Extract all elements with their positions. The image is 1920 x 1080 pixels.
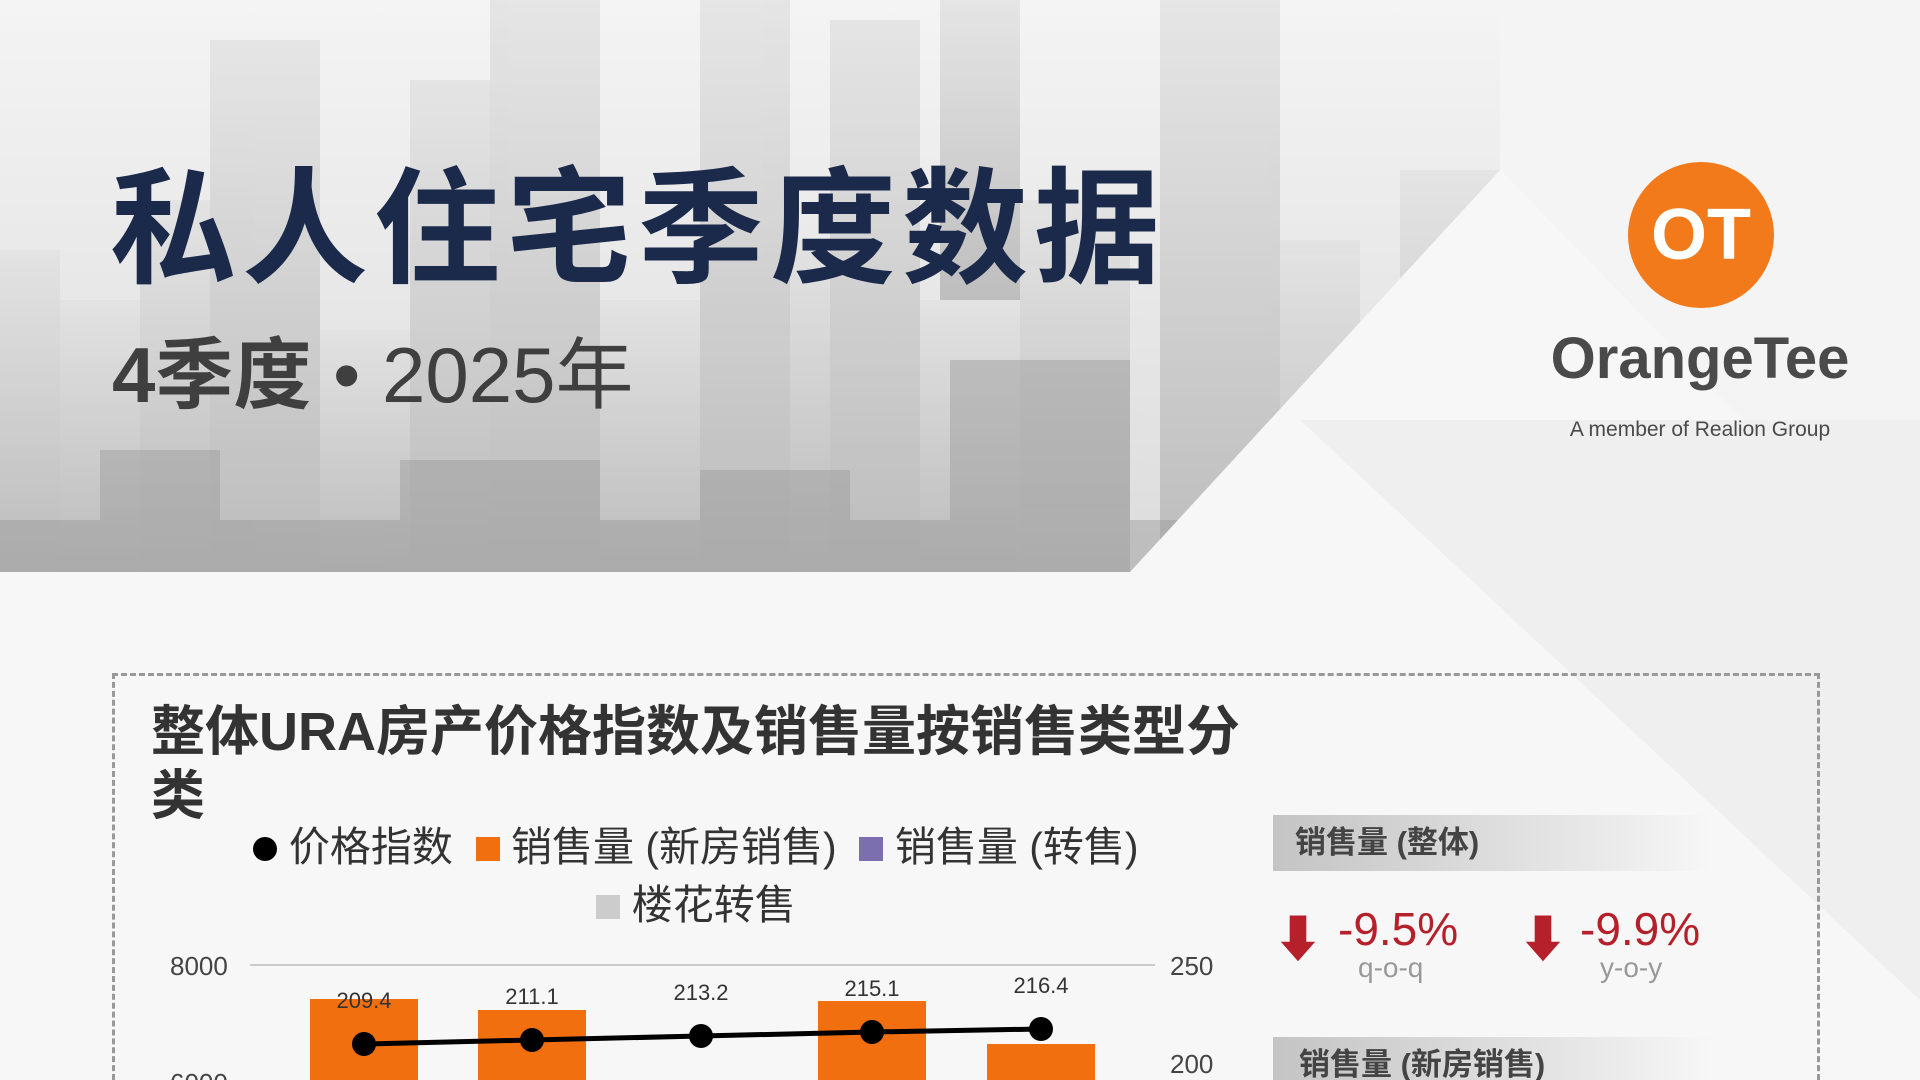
bar chart: 215.1 <box>844 976 900 1001</box>
legend: 价格指数 销售量 (新房销售) 销售量 (转售) <box>289 824 1139 870</box>
header bar: 销售量 (整体) <box>1295 825 1479 860</box>
background: city skyline <box>0 0 1500 572</box>
panel: chart box <box>112 673 1820 1080</box>
legend: 楼花转售 <box>632 882 796 928</box>
legend <box>253 824 1139 928</box>
bar chart: 209.4 <box>336 988 392 1013</box>
bar chart: 211.1 <box>505 984 559 1009</box>
stat q-o-q: -9.5% <box>1338 903 1458 955</box>
chart title: 整体URA房产价格指数及销售量按销售类型分类 <box>151 702 1240 826</box>
stat y-o-y: y-o-y <box>1600 952 1662 983</box>
bar chart: 200 <box>1170 1049 1213 1079</box>
icon: orange circle logo: OT <box>1651 195 1751 275</box>
icon: orange circle logo <box>1628 162 1774 308</box>
stat y-o-y <box>1518 903 1700 983</box>
bar chart: 250 <box>1170 951 1213 981</box>
bar chart: 216.4 <box>1013 973 1069 998</box>
panel: sales overall <box>1273 815 1700 983</box>
stat q-o-q <box>1273 903 1458 983</box>
stat y-o-y: -9.9% <box>1580 903 1700 955</box>
logo <box>1551 162 1849 441</box>
bar chart: 213.2 <box>673 980 729 1005</box>
stat q-o-q: ⬇ <box>1273 912 1323 968</box>
brand name: OrangeTee <box>1551 326 1849 391</box>
stat q-o-q: q-o-q <box>1358 952 1423 983</box>
title: 私人住宅季度数据 <box>110 159 1166 300</box>
stat y-o-y: ⬇ <box>1518 912 1568 968</box>
header bar <box>1273 815 1713 871</box>
bar chart <box>170 951 1213 1080</box>
tagline: A member of Realion Group <box>1570 418 1830 441</box>
subtitle: 4季度 • 2025年 <box>112 331 634 419</box>
panel: sales new <box>1273 1037 1713 1080</box>
bar chart: 8000 <box>170 951 228 981</box>
